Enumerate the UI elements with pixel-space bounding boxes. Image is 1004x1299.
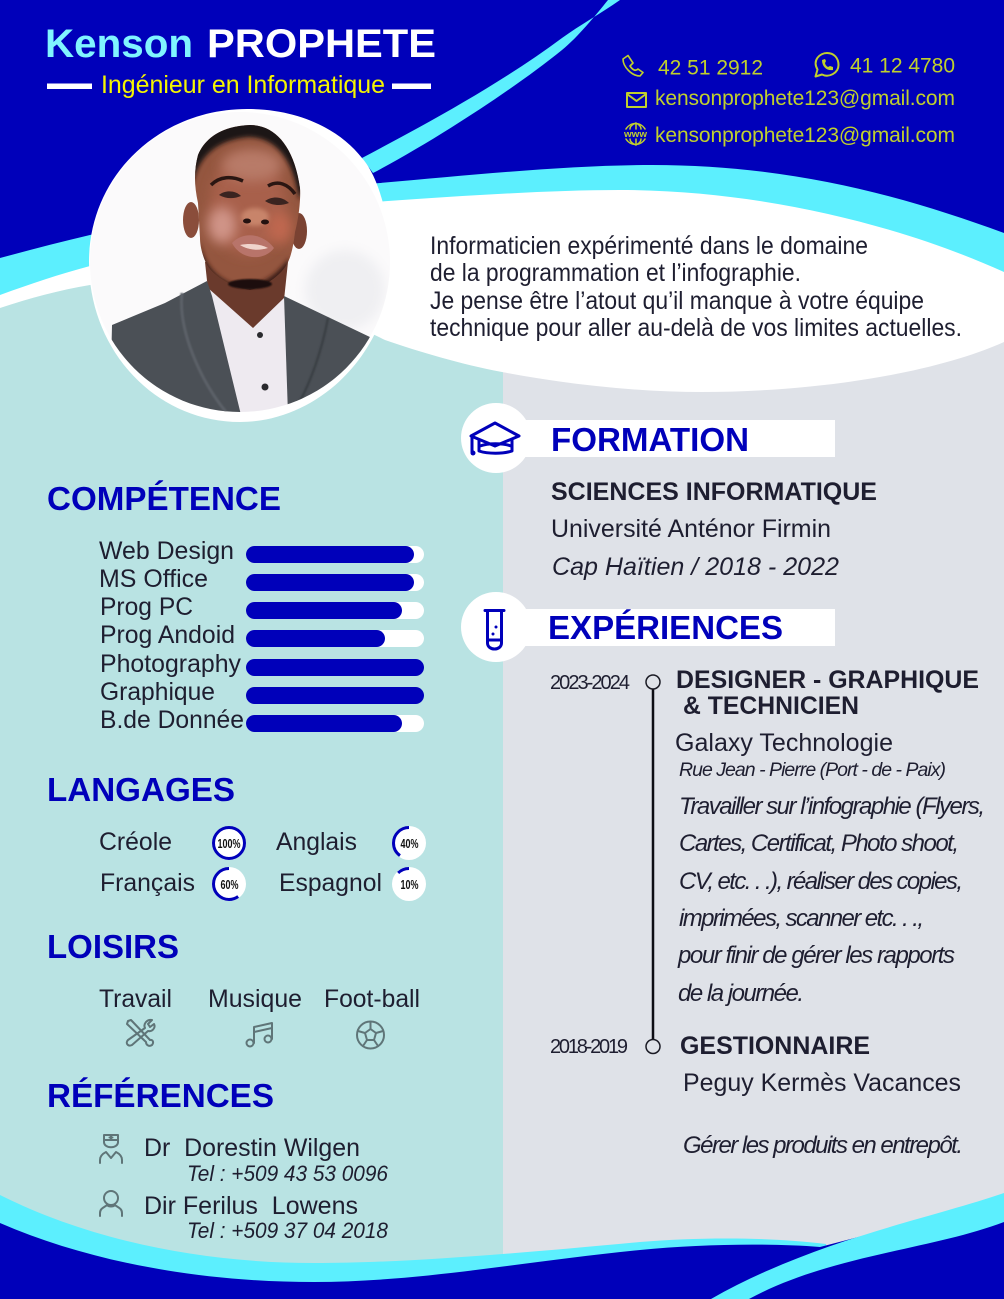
job 1 description: CV, etc. . .), réaliser des copies, [679, 868, 963, 895]
icon: doctor [100, 1135, 122, 1163]
language: creole 100% [99, 826, 246, 860]
hobby labels [99, 985, 420, 1013]
language: anglais 40% [276, 826, 426, 860]
formation header bar [520, 420, 835, 457]
panel: formation [461, 403, 877, 581]
language: anglais 40%: 40% [400, 837, 418, 851]
nose [241, 208, 269, 226]
icon: web globe [623, 123, 648, 145]
icon: web globe: www [623, 129, 648, 140]
name title [45, 22, 436, 66]
decorative arc: top right cyan stripe [362, 0, 620, 173]
date 1: 2023-2024 [550, 672, 630, 694]
date 2: 2018-2019 [550, 1036, 628, 1058]
hobby labels: Foot-ball [324, 985, 420, 1013]
job 1 title: & TECHNICIEN [683, 692, 859, 720]
reference 1 phone: Tel : +509 43 53 0096 [187, 1161, 389, 1186]
name title: Kenson [45, 22, 193, 66]
language: creole 100%: Créole [99, 828, 172, 856]
job 1 address: Rue Jean - Pierre (Port - de - Paix) [679, 759, 946, 781]
icon: graduation cap [461, 403, 531, 473]
shirt buttons [257, 332, 263, 338]
experiences header bar [520, 609, 835, 646]
shirt [208, 288, 288, 414]
language: espagnol 10%: Espagnol [279, 869, 382, 897]
language: espagnol 10% [279, 867, 426, 901]
ears [183, 202, 199, 238]
jacket [110, 281, 372, 415]
heading: experiences: EXPÉRIENCES [548, 609, 783, 646]
job 1 description: Cartes, Certificat, Photo shoot, [679, 830, 959, 857]
email: kensonprophete123@gmail.com [655, 87, 955, 110]
intro paragraph [430, 232, 962, 342]
job 1 description: pour finir de gérer les rapports [677, 942, 955, 969]
head [195, 125, 300, 290]
job 2 title: GESTIONNAIRE [680, 1032, 870, 1060]
language: francais 60%: 60% [220, 878, 238, 892]
mouth [232, 235, 274, 257]
hobby labels: Travail [99, 985, 172, 1013]
face shading [195, 125, 300, 290]
skill labels: Prog Andoid [100, 621, 235, 649]
job 1 title: DESIGNER - GRAPHIQUE [676, 666, 979, 694]
icon: football [357, 1022, 384, 1048]
language: anglais 40%: Anglais [276, 828, 357, 856]
panel: loisirs [47, 928, 420, 1048]
job 1 description: imprimées, scanner etc. . ., [679, 905, 924, 932]
icon: music note [246, 1023, 272, 1046]
intro paragraph: technique pour aller au-delà de vos limites actuelles. [430, 314, 962, 342]
job 1 description: Travailler sur l’infographie (Flyers, [679, 793, 985, 820]
job 1 company: Galaxy Technologie [675, 729, 893, 757]
reference 2 name: Dir Ferilus Lowens [144, 1192, 358, 1220]
panel: competences [47, 480, 424, 734]
panel: experiences [461, 592, 985, 1159]
portrait frame [89, 109, 391, 422]
job 1 description: de la journée. [678, 980, 804, 1007]
icon: phone [623, 56, 643, 76]
language: francais 60% [100, 867, 246, 901]
skill bars [246, 546, 424, 732]
skill labels: Prog PC [100, 593, 193, 621]
skill labels: Photography [100, 650, 241, 678]
panel: langages [47, 771, 426, 901]
intro paragraph: Je pense être l’atout qu’il manque à votre équipe [430, 287, 924, 315]
skill labels: Graphique [100, 678, 215, 706]
eyes [219, 191, 241, 198]
job 1 description [677, 793, 985, 1007]
language: espagnol 10%: 10% [400, 878, 418, 892]
job 2 description: Gérer les produits en entrepôt. [683, 1132, 963, 1159]
icon: test tube [461, 592, 531, 662]
skill labels: Web Design [99, 537, 234, 565]
heading: references: RÉFÉRENCES [47, 1077, 274, 1114]
job 2 company: Peguy Kermès Vacances [683, 1069, 961, 1097]
reference 1 name: Dr Dorestin Wilgen [144, 1134, 360, 1162]
website: kensonprophete123@gmail.com [655, 124, 955, 147]
icon: mail [627, 93, 646, 107]
skill labels [99, 537, 244, 734]
icon: person [100, 1191, 122, 1216]
intro paragraph: Informaticien expérimenté dans le domaine [430, 232, 868, 260]
intro paragraph: de la programmation et l’infographie. [430, 259, 801, 287]
university: Université Anténor Firmin [551, 515, 831, 543]
portrait photo [112, 125, 388, 412]
eyebrows [211, 178, 243, 185]
reference 2 phone: Tel : +509 37 04 2018 [187, 1218, 389, 1243]
timeline [646, 675, 660, 1054]
language: creole 100%: 100% [218, 837, 240, 851]
heading: competence: COMPÉTENCE [47, 480, 281, 517]
language: francais 60%: Français [100, 869, 195, 897]
hobby labels: Musique [208, 985, 302, 1013]
icon: tools [127, 1020, 155, 1046]
job subtitle: Ingénieur en Informatique [101, 71, 385, 99]
goatee [228, 279, 272, 289]
skill labels: MS Office [99, 565, 208, 593]
footer waves [0, 1193, 1004, 1299]
heading: loisirs: LOISIRS [47, 928, 179, 965]
phone number: 42 51 2912 [658, 56, 763, 80]
panel: references [47, 1077, 389, 1243]
degree: SCIENCES INFORMATIQUE [551, 478, 877, 506]
neck [205, 262, 288, 330]
name title: PROPHETE [207, 22, 436, 66]
heading: formation: FORMATION [551, 421, 749, 458]
wave: cyan header band [0, 165, 1004, 400]
skill labels: B.de Donnée [100, 706, 244, 734]
icon: whatsapp [816, 53, 838, 76]
heading: langages: LANGAGES [47, 771, 235, 808]
whatsapp number: 41 12 4780 [850, 54, 955, 78]
place and dates: Cap Haïtien / 2018 - 2022 [552, 553, 839, 581]
wave: white intro shape [0, 190, 1004, 420]
panels: left teal and right grey columns [0, 270, 1004, 1299]
contact block [623, 53, 955, 147]
job 1 title [676, 666, 979, 720]
